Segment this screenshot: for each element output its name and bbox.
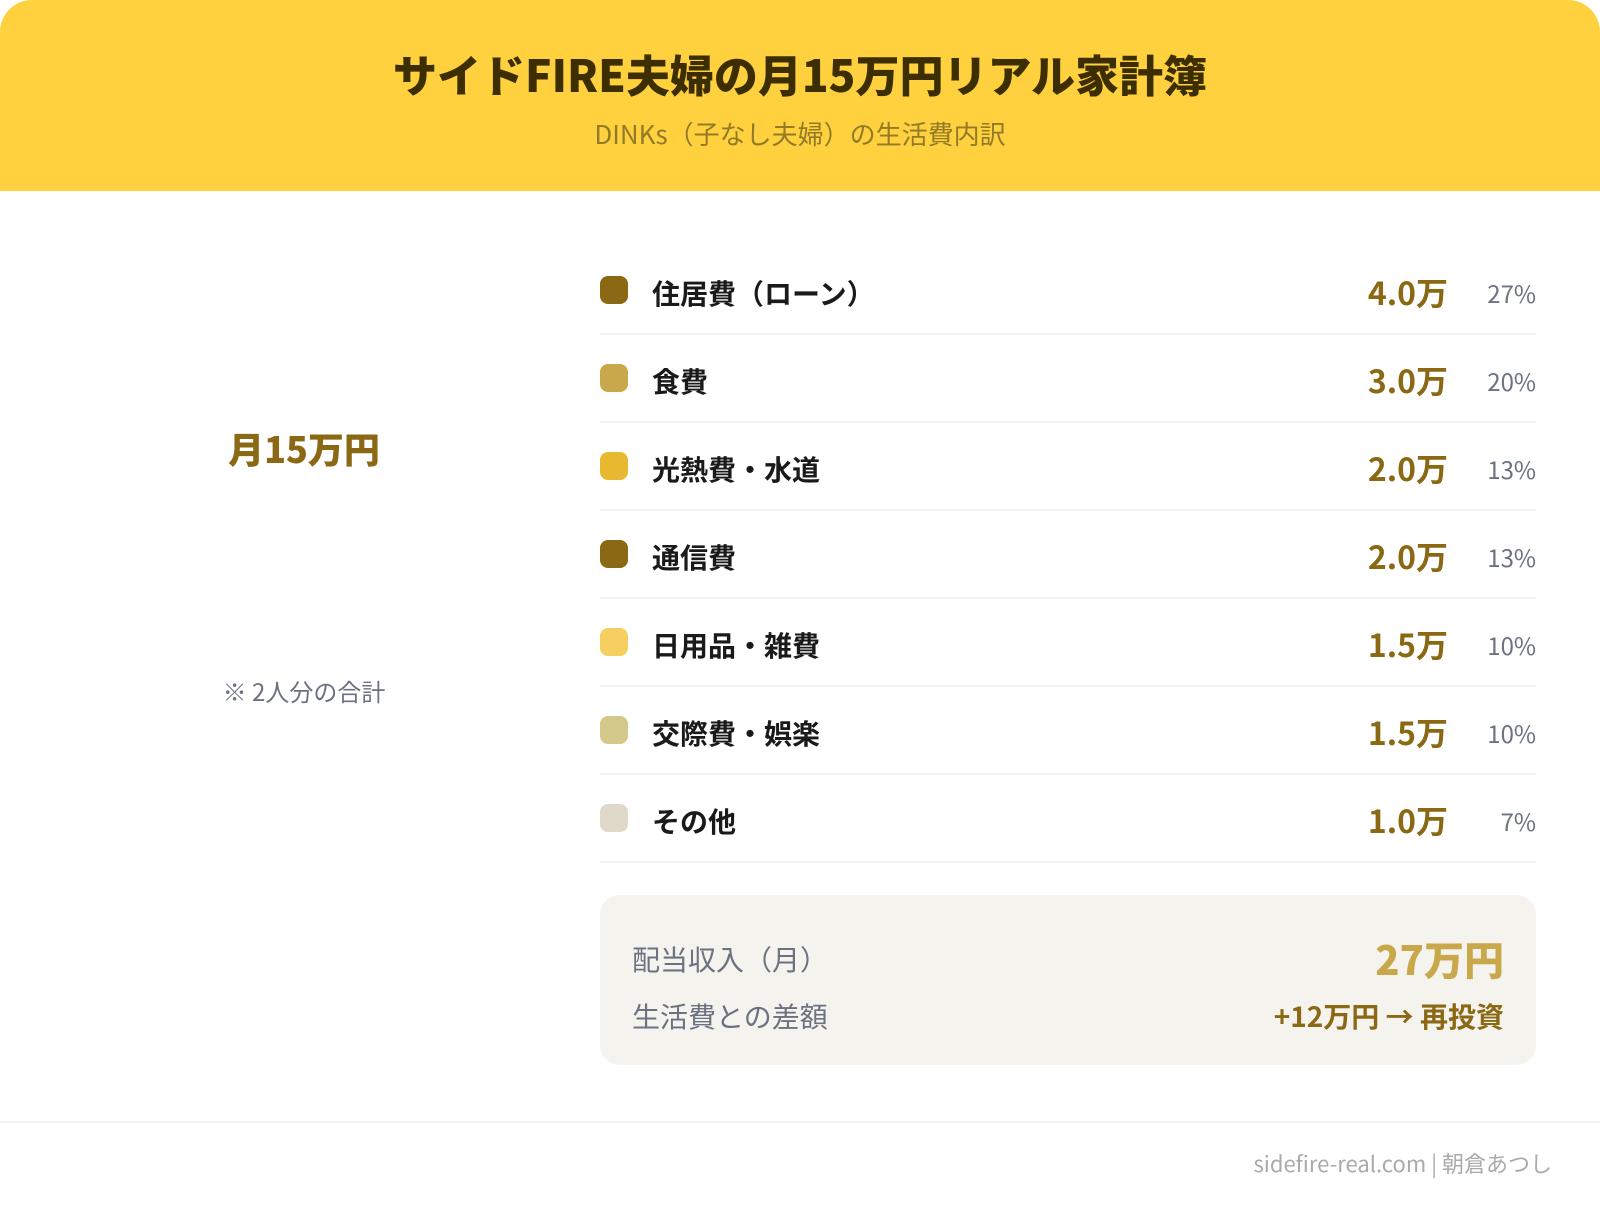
row: daily goods: [600, 598, 1536, 687]
row: utilities: [600, 422, 1536, 511]
row: housing: [600, 246, 1536, 335]
total label: 月15万円: [228, 422, 380, 474]
row: telecom: [600, 510, 1536, 599]
row: housing: 27%: [1487, 275, 1536, 310]
row: daily goods: 日用品・雑費: [652, 625, 820, 665]
row: utilities: 光熱費・水道: [652, 449, 820, 489]
row: food: 3.0万: [1368, 357, 1448, 403]
row: food: [600, 334, 1536, 423]
title: サイドFIRE夫婦の月15万円リアル家計簿: [393, 41, 1207, 105]
dividend amount: 27万円: [1375, 929, 1504, 987]
row: utilities: 13%: [1487, 451, 1536, 486]
row: other: 1.0万: [1368, 797, 1448, 843]
row: telecom: 通信費: [652, 537, 736, 577]
row: food: 20%: [1487, 363, 1536, 398]
difference label: 生活費との差額: [632, 996, 828, 1036]
footnote: ※ 2人分の合計: [223, 673, 385, 708]
row: daily goods: 1.5万: [1368, 621, 1448, 667]
row: social and entertainment: 10%: [1487, 715, 1536, 750]
row: daily goods: 10%: [1487, 627, 1536, 662]
row: other: その他: [652, 801, 736, 841]
row: utilities: 2.0万: [1368, 445, 1448, 491]
summary panel: [600, 895, 1536, 1065]
row: housing: 4.0万: [1368, 269, 1448, 315]
difference amount: +12万円 → 再投資: [1274, 996, 1504, 1036]
row: social and entertainment: 1.5万: [1368, 709, 1448, 755]
row: other: [600, 774, 1536, 863]
row: social and entertainment: [600, 686, 1536, 775]
footer divider: [0, 1121, 1600, 1123]
row: other: 7%: [1501, 803, 1536, 838]
row: telecom: 2.0万: [1368, 533, 1448, 579]
dividend label: 配当収入（月）: [632, 939, 828, 979]
row: housing: 住居費（ローン）: [652, 273, 875, 313]
subtitle: DINKs（子なし夫婦）の生活費内訳: [594, 115, 1006, 152]
row: food: 食費: [652, 361, 708, 401]
row: telecom: 13%: [1487, 539, 1536, 574]
footer credit: sidefire-real.com | 朝倉あつし: [1253, 1147, 1552, 1179]
row: social and entertainment: 交際費・娯楽: [652, 713, 820, 753]
header band: [0, 0, 1600, 191]
